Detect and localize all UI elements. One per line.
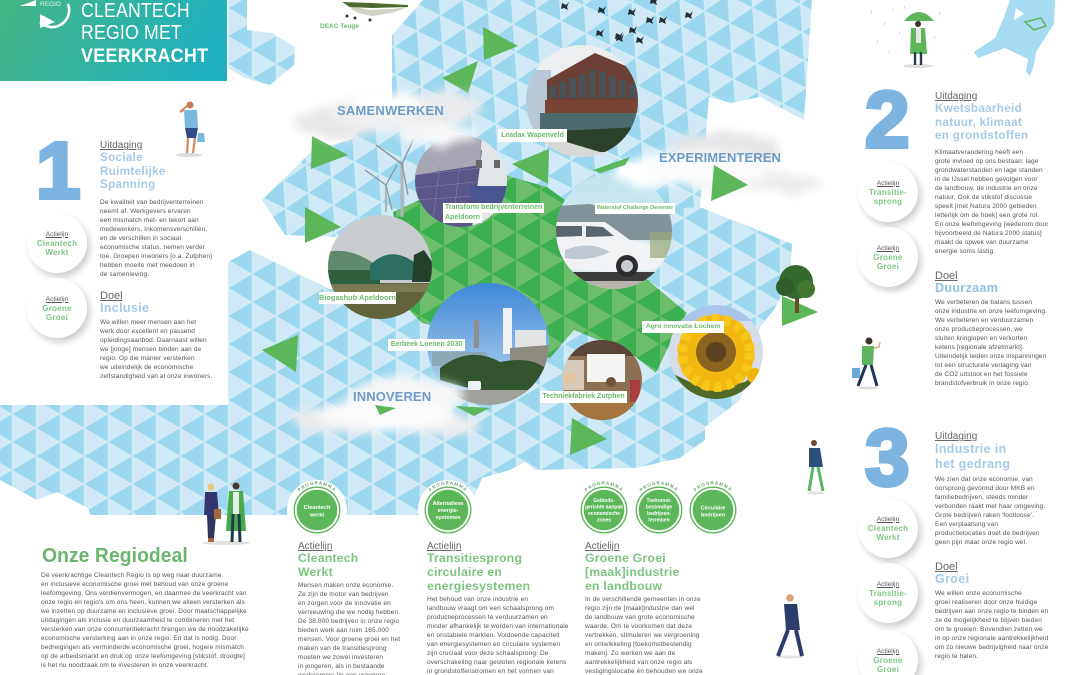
circle: actielijn Transitiesprong: Transitie- <box>869 188 907 196</box>
text: doel duurzaam: Uiteindelijk leiden onze inspanningen <box>935 352 1046 360</box>
text: doel duurzaam: We verbeteren en verduurzamen <box>935 316 1033 324</box>
text: doel groei: in op onze regionale aantrekkelijkheid <box>935 634 1048 642</box>
circle: actielijn Cleantech Werkt: Werkt <box>45 248 69 256</box>
heading: Actielijn <box>585 541 619 552</box>
cloud: innoveren <box>295 378 480 435</box>
text: uitdaging 3: geen pijn maar onze regio wel. <box>935 538 1027 546</box>
program badges <box>287 480 736 534</box>
text: uitdaging 3: familiebedrijven, steeds minder <box>935 494 1028 500</box>
heading: Doel Inclusie: Inclusie <box>100 301 149 315</box>
text: uitdaging 2: Klimaatverandering heeft een <box>935 148 1023 156</box>
text: uitdaging 2: in de IJssel hebben gevolgen voor <box>935 176 1038 182</box>
circle: actielijn Groene Groei: Groene <box>873 252 903 262</box>
badge: Alternatieve energiesystemen: PROGRAMMA <box>428 481 466 492</box>
photo: Waterstof Challenge car <box>552 173 672 289</box>
text: regiodeal intro <box>41 572 249 668</box>
heading: Doel Groei <box>935 561 969 586</box>
heading: Doel Duurzaam: Doel <box>935 270 958 282</box>
heading: Doel Inclusie <box>100 290 149 315</box>
text: regiodeal intro: bedreigingen als verminderde economische groei, hogere mismatch <box>41 644 244 650</box>
text: uitdaging 1: de samenleving. <box>100 270 149 278</box>
text: minder afhankelijk te worden van internationale <box>427 622 568 630</box>
panel: Onze Regiodeal <box>41 544 249 668</box>
heading: Kwetsbaarheid natuur, klimaat en grondstoffen: Uitdaging <box>935 91 977 102</box>
text: uitdaging 2: letterlijk om de hoek] een grote rol. <box>935 212 1039 218</box>
text: uitdaging 3: Een verplaatsing van <box>935 520 998 528</box>
badge: Toekomstbestendige bedrijventerreinen: bedrijven- <box>647 511 671 517</box>
text: doel groei: om zo nieuwe bedrijvigheid naar onze <box>935 644 1048 650</box>
text: regiodeal intro: op de arbeidsmarkt en druk op onze leefomgeving [stikstof, droogte] <box>41 652 245 660</box>
text: van energiesystemen en circulaire systemen <box>427 640 560 648</box>
text: doel duurzaam: ketens [regionale afzetmarkt]. <box>935 344 1024 350</box>
heading: Kwetsbaarheid natuur, klimaat en grondstoffen: natuur, klimaat <box>935 116 1022 129</box>
badge: Circulaire bedrijven <box>690 481 736 534</box>
text: landbouw vraagt om een schaalsprong om <box>427 604 554 612</box>
text: uitdaging 1: een mismatch met- en tekort aan <box>100 216 199 224</box>
green hexagon mesh <box>393 175 687 373</box>
heading: Doel Duurzaam <box>935 270 998 295</box>
text: doel inclusie: we uiteindelijk de economische <box>100 364 193 370</box>
text: regiodeal intro: uitdagingen als inclusie en duurzaamheid te combineren met het <box>41 616 234 624</box>
badge: Alternatieve energiesystemen <box>418 480 474 534</box>
badge: Toekomstbestendige bedrijventerreinen: PROGRAMMA <box>639 481 678 492</box>
text: doel inclusie: we [jonge] mensen binden aan de <box>100 346 201 352</box>
heading: Sociale Ruimtelijke Spanning <box>100 140 166 191</box>
caption: Waterstof Challenge Deventer <box>595 203 675 214</box>
icon: map of the Netherlands <box>974 0 1055 76</box>
text: doel duurzaam: tot een structurele verlaging van <box>935 362 1031 368</box>
text: en zorgen voor de innovatie en <box>298 600 391 606</box>
text: uitdaging 2: speelt [met Natura 2000 gebieden <box>935 202 1037 210</box>
text: regiodeal intro: leefomgeving. Ons verdienvermogen, en daarmee de veerkracht van <box>41 590 247 596</box>
text: zijn cruciaal voor deze schaalsprong. De <box>427 650 548 656</box>
badge: Gebiedsgerichte aanpak economische zones: economische <box>588 511 620 517</box>
text: en ontwikkeling [toekomstbestendig <box>585 640 692 648</box>
text: doel inclusie: We willen meer mensen aan het <box>100 318 196 326</box>
title block: REGIO <box>40 1 61 8</box>
photo: Biogashub Apeldoorn <box>328 215 432 319</box>
caption: Leadax Wapenveld <box>498 129 567 142</box>
title block: REGIO MET <box>81 22 182 44</box>
text: regiodeal intro: is het nu noodzaak om te investeren in onze veerkracht. <box>41 662 209 668</box>
panel: actielijn Transitiesprong <box>427 541 568 674</box>
caption: Transform bedrijventerreinen Apeldoorn: Apeldoorn <box>445 214 480 221</box>
text: doel groei: regio te halen. <box>935 652 978 660</box>
caption: Transform bedrijventerreinen Apeldoorn <box>443 203 544 223</box>
panel: uitdaging 2 <box>858 75 1049 386</box>
text: uitdaging 1: toe. Groepen inwoners [o.a. Zutphen] <box>100 252 212 260</box>
text: uitdaging 1: medewerkers. Inkomensverschillen, <box>100 226 207 232</box>
text: doel inclusie: werk door excellent en passend <box>100 328 195 334</box>
text <box>298 582 400 675</box>
photo: solar panels <box>415 135 507 228</box>
text <box>427 596 568 674</box>
heading: circulaire en <box>427 565 502 579</box>
heading: Doel Groei: Groei <box>935 572 969 586</box>
heading: Doel Groei: Doel <box>935 561 958 573</box>
circle: actielijn Cleantech Werkt <box>27 213 87 273</box>
text: doel duurzaam: de CO2 uitstoot en het fossiele <box>935 370 1028 378</box>
badge: Gebiedsgerichte aanpak economische zones: zones <box>597 518 611 524</box>
heading: Doel Inclusie: Doel <box>100 290 123 302</box>
text: doel duurzaam: onze productieprocessen, we <box>935 326 1023 332</box>
text: de landbouw van grote economische <box>585 614 695 620</box>
badge: Gebiedsgerichte aanpak economische zones: Gebieds- <box>593 498 615 504</box>
icon: couple walking <box>202 482 250 545</box>
circle: actielijn Cleantech Werkt <box>858 498 918 558</box>
heading: Kwetsbaarheid natuur, klimaat en grondstoffen <box>935 91 1028 142</box>
text: doel groei <box>935 590 1048 660</box>
caption: Leadax Wapenveld: Leadax Wapenveld <box>501 132 564 139</box>
badge: Alternatieve energiesystemen: Alternatieve <box>433 501 463 507</box>
text: doel inclusie: opleidingsaanbod. Daarnaast willen <box>100 336 207 344</box>
heading: Werkt <box>298 565 333 579</box>
text: waarde. Om te voorkomen dat deze <box>585 622 692 630</box>
badge: Gebiedsgerichte aanpak economische zones <box>580 481 628 534</box>
heading: Actielijn <box>298 541 332 552</box>
text: doel groei: We willen onze economische <box>935 590 1022 596</box>
text: regio zijn de [maak]industrie dan wel <box>585 604 695 612</box>
heading: Industrie in het gedrang <box>935 431 1010 470</box>
theme label: Experimenteren: EXPERIMENTEREN <box>659 150 781 165</box>
caption: Transform bedrijventerreinen Apeldoorn: Transform bedrijventerreinen <box>445 204 542 211</box>
circle: actielijn Groene Groei: Groei <box>877 262 899 270</box>
heading: Sociale Ruimtelijke Spanning: Uitdaging <box>100 140 142 151</box>
title block: VEERKRACHT <box>81 45 208 67</box>
circle: actielijn Groene Groei: Actielijn <box>877 244 899 252</box>
circle: actielijn Groene Groei <box>858 227 918 287</box>
photo: Techniekfabriek Zutphen <box>562 340 642 420</box>
circle: actielijn Cleantech Werkt: Actielijn <box>877 516 899 522</box>
caption: Techniekfabriek Zutphen: Techniekfabriek Zutphen <box>542 393 625 400</box>
heading <box>585 541 680 593</box>
text: maken van de transitiesprong <box>298 644 387 652</box>
panel: actielijn Cleantech Werkt <box>298 541 400 675</box>
circle: actielijn Transitiesprong: sprong <box>874 196 902 206</box>
text: in jongeren, als in bestaande <box>298 662 385 670</box>
number 1: 1 <box>36 126 80 215</box>
panel: uitdaging 3 <box>858 413 1048 675</box>
circle: actielijn Transitiesprong <box>858 162 918 222</box>
caption: Techniekfabriek Zutphen <box>540 391 627 403</box>
text: vertrekken, stimuleren we vergroening <box>585 632 700 638</box>
heading: Sociale Ruimtelijke Spanning: Ruimtelijke <box>100 165 166 178</box>
icon: airplane <box>342 2 408 22</box>
text: regiodeal intro: en inclusieve economische groei met behoud van onze groene <box>41 580 228 588</box>
badge: Cleantech werkt <box>287 480 347 534</box>
heading: en landbouw <box>585 579 662 593</box>
text: vernieuwing die we nodig hebben. <box>298 608 400 616</box>
text: uitdaging 3: verbonden raakt met haar omgeving. <box>935 502 1045 510</box>
caption: Agro innovatie Lochem <box>642 321 724 333</box>
text: bieden werk aan ruim 165.000 <box>298 626 389 634</box>
circle: actielijn Transitiesprong: Actielijn <box>877 580 899 588</box>
photo: Eerbeek Loenen <box>427 283 549 406</box>
text: De 38.000 bedrijven in onze regio <box>298 618 399 624</box>
icon: regio logo <box>20 0 69 28</box>
circle: actielijn Groene Groei: Groei <box>877 664 899 674</box>
icon: tree <box>776 265 815 313</box>
badge: Gebiedsgerichte aanpak economische zones: PROGRAMMA <box>584 481 622 492</box>
text: uitdaging 2: energie soms lastig. <box>935 248 995 254</box>
text: doel inclusie: zelfstandigheid van al onze inwoners. <box>100 372 212 380</box>
text: doel duurzaam: onze industrie en onze leefomgeving. <box>935 308 1047 314</box>
text: uitdaging 2: bijvoorbeeld de Natura 2000 status] <box>935 230 1042 236</box>
heading: [maak]industrie <box>585 565 680 579</box>
caption: Eerbeek Loenen 2030: Eerbeek Loenen 2030 <box>391 341 462 348</box>
text <box>585 596 703 674</box>
text: uitdaging 2: natuur. Ook de stikstof discussie <box>935 194 1032 200</box>
text: uitdaging 2: maakt de opwek van duurzame <box>935 238 1029 246</box>
badge: Cleantech werkt: PROGRAMMA <box>297 481 336 492</box>
badge: Circulaire bedrijven: PROGRAMMA <box>693 481 732 492</box>
text: uitdaging 3: productielocaties doet de bedrijven <box>935 530 1040 536</box>
badge: Toekomstbestendige bedrijventerreinen <box>636 481 682 534</box>
badge: Cleantech werkt: werkt <box>309 512 324 518</box>
text: productieprocessen te verduurzamen en <box>427 614 548 620</box>
badge: Cleantech werkt: Cleantech <box>304 505 331 511</box>
heading: Kwetsbaarheid natuur, klimaat en grondstoffen: en grondstoffen <box>935 129 1028 142</box>
circle: actielijn Groene Groei <box>858 630 918 675</box>
theme label: Samenwerken: SAMENWERKEN <box>337 103 444 118</box>
text: doel duurzaam <box>935 298 1047 386</box>
circle: actielijn Transitiesprong: Actielijn <box>877 180 899 186</box>
text: Mensen maken onze economie. <box>298 582 393 588</box>
text: doel duurzaam: sluiten kringlopen en verkorten <box>935 334 1027 342</box>
heading: Cleantech <box>298 551 358 565</box>
caption: Eerbeek Loenen 2030 <box>388 339 465 351</box>
circle: actielijn Groene Groei: Actielijn <box>877 648 899 654</box>
text: uitdaging 1: en de verschillen in sociaal <box>100 234 181 242</box>
photo: Leadax Wapenveld <box>526 45 640 157</box>
badge: Toekomstbestendige bedrijventerreinen: terreinen <box>648 518 670 524</box>
text: doel groei: om te groeien. Bovendien zetten we <box>935 626 1043 632</box>
text: uitdaging 2 <box>935 148 1049 254</box>
text: regiodeal intro: De veerkrachtige Cleantech Regio is op weg naar duurzame <box>41 572 222 578</box>
text: maken]. Zo werken we aan de <box>585 650 675 656</box>
circle: actielijn Cleantech Werkt: Cleantech <box>868 524 908 532</box>
text: regiodeal intro: we inzetten op duurzame en inclusieve groei. Door maatschappelijke <box>41 608 247 614</box>
heading: Transitiesprong <box>427 551 522 565</box>
heading: Kwetsbaarheid natuur, klimaat en grondstoffen: Kwetsbaarheid <box>935 102 1022 115</box>
circle: actielijn Cleantech Werkt: Cleantech <box>37 238 77 248</box>
badge: Circulaire bedrijven: bedrijven <box>701 512 725 518</box>
badge: Gebiedsgerichte aanpak economische zones: gerichte aanpak <box>585 504 623 510</box>
number 2: 2 <box>865 75 910 164</box>
text: doel duurzaam: brandstofverbruik in onze regio. <box>935 380 1030 386</box>
green accent triangles <box>262 27 818 455</box>
text: regiodeal intro: onze regio en regio's om ons heen, kunnen we alleen versterken als <box>41 598 245 606</box>
circle: actielijn Groene Groei <box>27 278 87 338</box>
circle: actielijn Cleantech Werkt: Actielijn <box>46 230 68 238</box>
text: overschakeling naar gesloten regionale ketens <box>427 658 566 666</box>
badge: Toekomstbestendige bedrijventerreinen: bestendige <box>646 504 672 510</box>
icon: man walking in dark suit <box>776 594 804 658</box>
triangle mesh background <box>0 0 812 515</box>
title block <box>40 0 208 67</box>
text: in grondstoffenstromen en het vormen van <box>427 668 554 674</box>
text: uitdaging 2: En onze leefomgeving [wederom door <box>935 220 1049 228</box>
text: uitdaging 2: de landbouw, de industrie en onze <box>935 184 1038 192</box>
text: doel inclusie: regio. Op die manier versterken <box>100 354 195 362</box>
cloud: samenwerken <box>294 92 481 145</box>
text: uitdaging 2: grote invloed op ons bestaan: lage <box>935 158 1038 164</box>
text: uitdaging 1: De kwaliteit van bedrijventerreinen <box>100 198 204 206</box>
text: uitdaging 3: Grote bedrijven raken 'footloose'. <box>935 512 1034 518</box>
theme label: Innoveren: INNOVEREN <box>353 389 431 404</box>
text: uitdaging 1: economische status, nemen verder <box>100 244 205 250</box>
icon: flock of birds <box>561 0 693 44</box>
text: doel duurzaam: We verbeteren de balans tussen <box>935 298 1032 306</box>
heading: Industrie in het gedrang: Industrie in <box>935 442 1007 456</box>
circle: actielijn Groene Groei: Groene <box>873 656 903 664</box>
text: uitdaging 1: hebben moeite met meedoen in <box>100 262 195 268</box>
caption: Agro innovatie Lochem: Agro innovatie Lochem <box>646 323 720 330</box>
text: moeten we zowel investeren <box>298 654 383 660</box>
caption: Biogashub Apeldoorn: Biogashub Apeldoorn <box>319 293 396 302</box>
text: Het behoud van onze industrie en <box>427 596 528 602</box>
text: vestigingslocatie én behouden we onze <box>585 668 703 674</box>
text: uitdaging 3: We zien dat onze economie, van <box>935 476 1033 482</box>
circle: actielijn Transitiesprong: sprong <box>874 598 902 606</box>
circle: actielijn Groene Groei: Groene <box>42 304 72 312</box>
badge: Alternatieve energiesystemen: energie- <box>438 508 459 514</box>
circle: actielijn Groene Groei: Actielijn <box>46 296 68 302</box>
badge: Toekomstbestendige bedrijventerreinen: Toekomst- <box>647 498 672 504</box>
text: uitdaging 2: grondwaterstanden en lage standen <box>935 166 1043 174</box>
text: uitdaging 1: neemt af. Werkgevers ervaren <box>100 208 191 214</box>
header banner <box>0 0 227 81</box>
heading <box>298 541 358 579</box>
title block: CLEANTECH <box>81 0 190 22</box>
text: uitdaging 1 <box>100 198 212 278</box>
icon: wind turbines <box>365 138 414 217</box>
text: regiodeal intro: economische versterking aan in onze regio. En dat is nodig. Door <box>41 634 237 642</box>
icon: woman walking in green <box>806 440 824 494</box>
circle: actielijn Groene Groei: Groei <box>46 312 68 322</box>
circle: actielijn Transitiesprong <box>858 563 918 623</box>
cloud: experimenteren <box>614 132 822 193</box>
text: doel inclusie <box>100 318 212 380</box>
photo: sunflower Lochem <box>669 305 763 400</box>
heading: Actielijn <box>427 541 461 552</box>
badge: Circulaire bedrijven: Circulaire <box>701 506 725 512</box>
heading: Industrie in het gedrang: Uitdaging <box>935 431 977 442</box>
location label: DEAC Teuge: DEAC Teuge <box>320 23 359 30</box>
number 3: 3 <box>865 413 910 502</box>
caption: Waterstof Challenge Deventer: Waterstof Challenge Deventer <box>597 205 673 211</box>
heading: Industrie in het gedrang: het gedrang <box>935 456 1010 470</box>
heading: energiesystemen <box>427 579 530 593</box>
green triangles over clouds <box>375 157 748 416</box>
icon: person walking with bag <box>852 338 880 390</box>
heading: Doel Duurzaam: Duurzaam <box>935 281 998 295</box>
text: Ze zijn de motor van bedrijven <box>298 590 389 598</box>
badge: Alternatieve energiesystemen: systemen <box>436 515 460 521</box>
heading: Onze Regiodeal: Onze Regiodeal <box>42 544 188 567</box>
text: en onstabiele markten. Voldoende capaciteit <box>427 632 560 638</box>
circle: actielijn Transitiesprong: Transitie- <box>869 588 907 598</box>
icon: person with umbrella in rain <box>871 6 940 68</box>
text: uitdaging 3 <box>935 476 1045 546</box>
circle: actielijn Cleantech Werkt: Werkt <box>876 532 900 542</box>
heading: Groene Groei <box>585 551 666 565</box>
panel: actielijn Groene Groei <box>585 541 703 674</box>
text: doel groei: ze de mogelijkheid te blijven bieden <box>935 616 1042 624</box>
heading <box>427 541 530 593</box>
icon: person with phone <box>176 102 205 157</box>
text: mensen. Voor groene groei en het <box>298 636 400 642</box>
text: regiodeal intro: versterken van onze concurrentiekracht brengen we de noodzakelijke <box>41 626 249 632</box>
heading: Sociale Ruimtelijke Spanning: Spanning <box>100 178 156 191</box>
heading: Sociale Ruimtelijke Spanning: Sociale <box>100 151 143 164</box>
panel: uitdaging 1 <box>27 126 212 380</box>
text: aantrekkelijkheid van onze regio als <box>585 658 692 666</box>
text: doel groei: groei realiseren door onze huidige <box>935 598 1037 606</box>
text: doel groei: bedrijven aan onze regio te binden en <box>935 608 1048 614</box>
text: In de verschillende gemeenten in onze <box>585 596 701 602</box>
text: uitdaging 3: oorsprong gevormd door MKB en <box>935 484 1035 492</box>
